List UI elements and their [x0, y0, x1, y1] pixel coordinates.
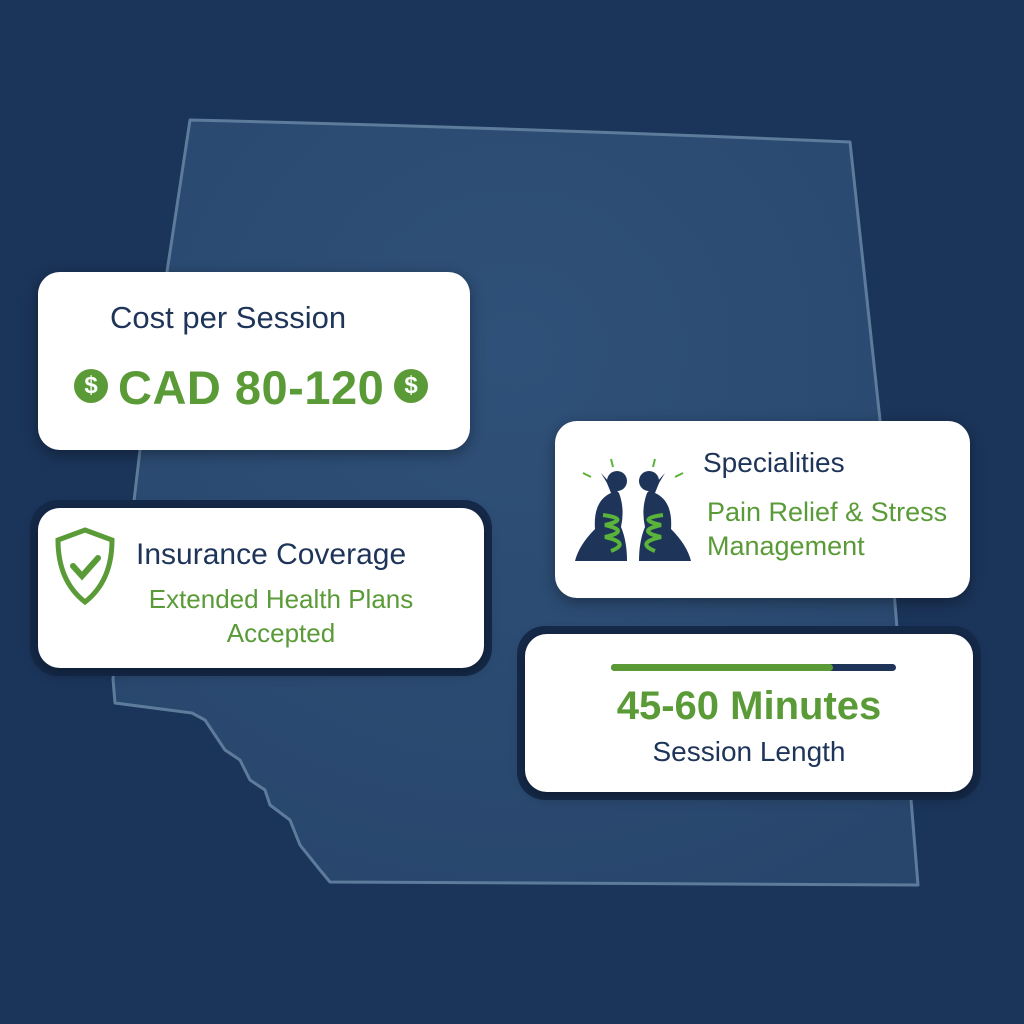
icon: dollar right: $ [404, 372, 418, 399]
text: specialities detail [707, 497, 947, 561]
label: session length: Session Length [652, 736, 846, 767]
card: insurance coverage [38, 508, 484, 668]
value: cost: CAD 80-120 [118, 361, 384, 414]
text: insurance detail [149, 584, 413, 648]
text: specialities detail: Pain Relief & Stress [707, 497, 947, 527]
text: insurance detail: Extended Health Plans [149, 584, 413, 614]
icon: dollar right [394, 369, 428, 403]
card: cost per session [38, 272, 470, 450]
heading: specialities: Specialities [703, 447, 845, 478]
progress bar [611, 664, 896, 671]
icon: dollar left: $ [84, 372, 98, 399]
icon: dollar left [74, 369, 108, 403]
heading: cost: Cost per Session [110, 300, 346, 335]
text: specialities detail: Management [707, 531, 865, 561]
heading: insurance: Insurance Coverage [136, 538, 406, 571]
value: minutes: 45-60 Minutes [617, 684, 881, 728]
card: session length [525, 634, 973, 792]
icon: shield check [56, 527, 114, 606]
icon: kneeling figures [575, 458, 691, 561]
frame: session [517, 626, 981, 800]
text: insurance detail: Accepted [227, 618, 335, 648]
frame: insurance [30, 500, 492, 676]
card: specialities [555, 421, 970, 598]
